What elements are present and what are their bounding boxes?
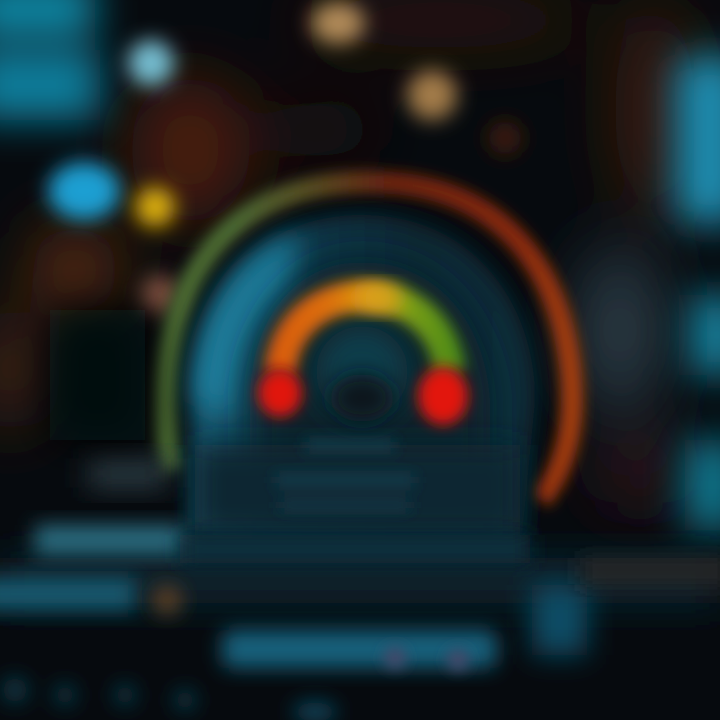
- panel: top left teal blocks: [0, 0, 100, 120]
- gauge needle hub: [330, 374, 394, 422]
- left mid grey block: [88, 458, 168, 488]
- right grey strip: [580, 558, 720, 584]
- right cyan block: [532, 585, 587, 655]
- desk bright left: [35, 525, 185, 555]
- orange spot: [152, 585, 182, 615]
- dome left highlight: [195, 235, 300, 420]
- light: pink: [140, 275, 180, 315]
- gauge left red end: [258, 369, 302, 417]
- light: yellow: [135, 187, 175, 227]
- gauge arc: [280, 296, 450, 372]
- desk mid strip: [180, 535, 530, 563]
- gauge center: [316, 326, 408, 418]
- strip left: [0, 578, 135, 610]
- dome lower panel: [195, 445, 520, 535]
- light: warm top: [311, 2, 365, 44]
- light: cyan blob: [48, 162, 120, 220]
- dome panel: [192, 215, 535, 535]
- lower panel bright bar: [222, 630, 497, 668]
- light: warm right: [407, 70, 457, 120]
- light: dim amber: [488, 121, 522, 155]
- panel: right teal blocks: [675, 55, 720, 530]
- dome text smudges: [275, 440, 415, 510]
- left dark column: [50, 310, 145, 440]
- gauge right red end: [418, 367, 468, 425]
- background: warm brown glow: [0, 0, 695, 505]
- gauge yellow peak: [356, 286, 400, 310]
- desk band: [0, 558, 720, 603]
- bottom dots: [2, 677, 337, 720]
- outer arc: [165, 182, 572, 500]
- dome inner dark ring: [250, 262, 490, 510]
- lower bar pink spots: [384, 647, 469, 671]
- light: pale blue: [128, 40, 174, 86]
